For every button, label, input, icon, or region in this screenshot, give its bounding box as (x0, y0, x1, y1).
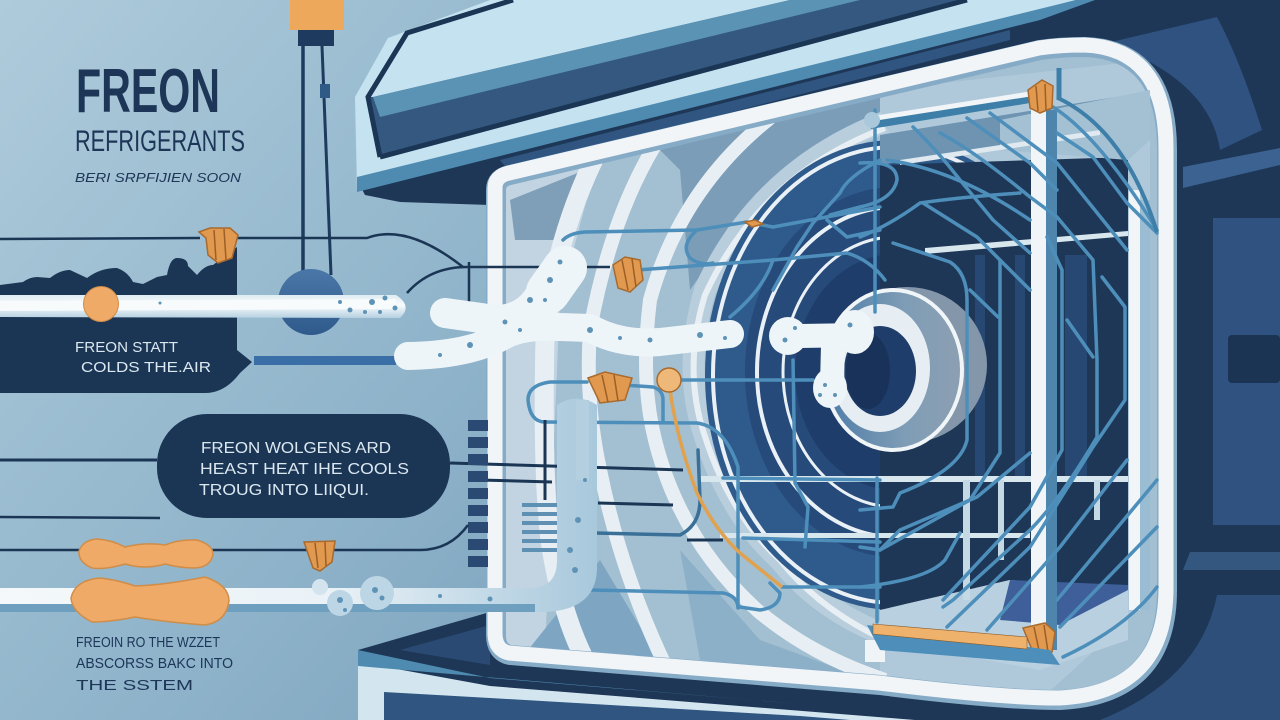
title: FREON (76, 57, 220, 126)
subtitle: REFRIGERANTS (75, 125, 245, 158)
lower sill of unit (358, 625, 915, 720)
callout: condenses (0, 414, 450, 518)
white frosted pipes (0, 268, 860, 385)
blue coil tubes (528, 107, 1157, 657)
caption: FREOIN RO THE WZZET (76, 634, 220, 651)
tagline: BERI SRPFIJIEN SOON (75, 170, 242, 185)
vertical pipe shading (576, 400, 589, 480)
dark block behind grid (880, 90, 1150, 670)
callout: condenses: HEAST HEAT IHE COOLS (200, 461, 409, 478)
lower pipe shading (0, 604, 535, 612)
frost bulbs (312, 310, 874, 616)
top hood of unit (355, 0, 1095, 192)
orange hanging valve (278, 0, 344, 335)
orange ball on top pipe (84, 286, 118, 322)
top coil bar (864, 68, 1157, 232)
pipe frost dots (158, 260, 852, 612)
orange capillary line (670, 390, 782, 587)
grid rails and posts (700, 110, 1150, 662)
wires lower left (0, 517, 468, 550)
vertical frosted pipe (0, 398, 597, 612)
copper rod (867, 624, 1060, 665)
condenser vents (468, 420, 488, 567)
caption: THE SSTEM (76, 677, 193, 694)
copper knots (199, 80, 1055, 657)
fan disc with rings (705, 140, 1085, 610)
wires upper (0, 234, 610, 302)
dark wires through the panel (450, 420, 723, 540)
callout: condenses: TROUG INTO LIIQUI. (199, 482, 369, 499)
fan hub (822, 287, 987, 452)
main white panel (495, 45, 1167, 700)
orange pipe bulbs (71, 539, 229, 625)
dark wavy liquid band and callout: freon start (0, 247, 396, 393)
callout: condenses: FREON WOLGENS ARD (201, 440, 391, 457)
machine housing (357, 0, 1280, 720)
panel interior shades (500, 60, 1150, 700)
caption: ABSCORSS BAKC INTO (76, 655, 233, 672)
dark wavy liquid band and callout: freon start: COLDS THE.AIR (81, 359, 211, 376)
dark wavy liquid band and callout: freon start: FREON STATT (75, 339, 178, 356)
grille arches (544, 118, 885, 680)
label stripes (522, 503, 558, 552)
